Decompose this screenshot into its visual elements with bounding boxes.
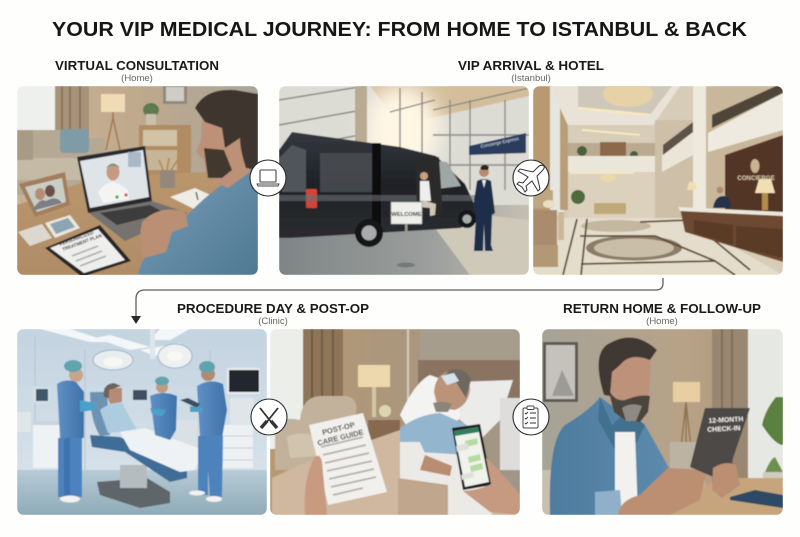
- photo prints: [18, 215, 80, 246]
- reception desk: [678, 207, 783, 262]
- panel: virtual consultation scene: [17, 86, 258, 277]
- tablet: 12-month check-in: [690, 408, 750, 482]
- tablet: treatment plan: PERSONALIZED: [59, 230, 95, 247]
- airport direction sign: Concierge Express: [480, 136, 520, 149]
- heading: procedure day and post-op: (Clinic): [258, 316, 288, 327]
- desk and notebook: [672, 478, 783, 515]
- icon: laptop: [250, 160, 286, 196]
- arrow: connector from hotel to procedure: [131, 278, 663, 324]
- airport direction sign: [469, 133, 526, 155]
- panel: recovery room scene: [270, 329, 520, 515]
- panel: hotel lobby scene: [533, 81, 783, 275]
- icon: crossed surgical instruments: [251, 399, 287, 435]
- black passenger van: [279, 132, 477, 247]
- document: post-op care guide: POST-OP: [321, 420, 356, 437]
- tablet: 12-month check-in: 12-MONTH: [708, 416, 744, 425]
- tablet: treatment plan: TREATMENT PLAN: [62, 233, 103, 252]
- tablet: treatment plan: [45, 225, 131, 277]
- armchair: [275, 396, 356, 470]
- document: post-op care guide: [309, 413, 387, 505]
- surgical lamps: [93, 344, 192, 370]
- pillows: [400, 375, 520, 470]
- resting patient: [400, 369, 471, 476]
- heading: return home and follow-up: (Home): [646, 316, 678, 327]
- heading: vip arrival and hotel: [458, 58, 604, 84]
- welcome sign: WELCOME: [391, 212, 422, 218]
- panel: operating room scene: [17, 329, 267, 515]
- desk lamp and clerk: [687, 179, 775, 210]
- welcome sign: [391, 202, 422, 268]
- hand holding phone: [463, 458, 520, 515]
- heading: vip arrival and hotel: VIP ARRIVAL & HOTEL: [458, 58, 604, 73]
- panel: return home scene: [542, 329, 783, 515]
- document: post-op care guide: CARE GUIDE: [316, 428, 364, 448]
- heading: virtual consultation: (Home): [121, 73, 153, 84]
- panel: airport arrival scene with van: [279, 85, 529, 275]
- floor lamp: [672, 382, 700, 442]
- icon: airplane: [513, 160, 549, 196]
- heading: vip arrival and hotel: (Istanbul): [511, 73, 551, 84]
- title: YOUR VIP MEDICAL JOURNEY: FROM HOME TO ISTANBUL & BACK: [52, 18, 747, 41]
- concierge wall sign: CONCIERGE: [737, 175, 775, 182]
- heading: virtual consultation: [55, 58, 219, 84]
- bed and blanket: [272, 430, 520, 515]
- medical cabinets and monitors: [17, 368, 260, 468]
- heading: procedure day and post-op: [177, 301, 369, 327]
- hand holding guide: [305, 456, 327, 515]
- heading: return home and follow-up: [563, 301, 761, 327]
- laptop on desk: [77, 146, 188, 241]
- tablet: 12-month check-in: CHECK-IN: [707, 425, 741, 434]
- smiling man in denim shirt: [550, 338, 683, 515]
- heading: procedure day and post-op: PROCEDURE DAY & POST-OP: [177, 301, 369, 316]
- icon: clipboard checklist: [513, 399, 549, 435]
- forearm and hand: [618, 468, 707, 515]
- heading: return home and follow-up: RETURN HOME & FOLLOW-UP: [563, 301, 761, 316]
- marble floor with medallion: [533, 218, 783, 275]
- heading: virtual consultation: VIRTUAL CONSULTATION: [55, 58, 219, 73]
- lounge seating: [533, 190, 564, 267]
- man with blue shirt: [138, 90, 258, 275]
- chauffeur in navy suit: [473, 165, 495, 251]
- concierge wall sign: [725, 135, 783, 215]
- surgeons in scrubs: [57, 360, 227, 502]
- potted plant: [762, 396, 783, 478]
- icon: family photo frame: [19, 172, 70, 217]
- treatment chair with patient: [90, 383, 203, 508]
- notebook and pen cup: [158, 158, 210, 210]
- smartphone with chat: [452, 424, 492, 490]
- hand gripping tablet: [712, 463, 740, 498]
